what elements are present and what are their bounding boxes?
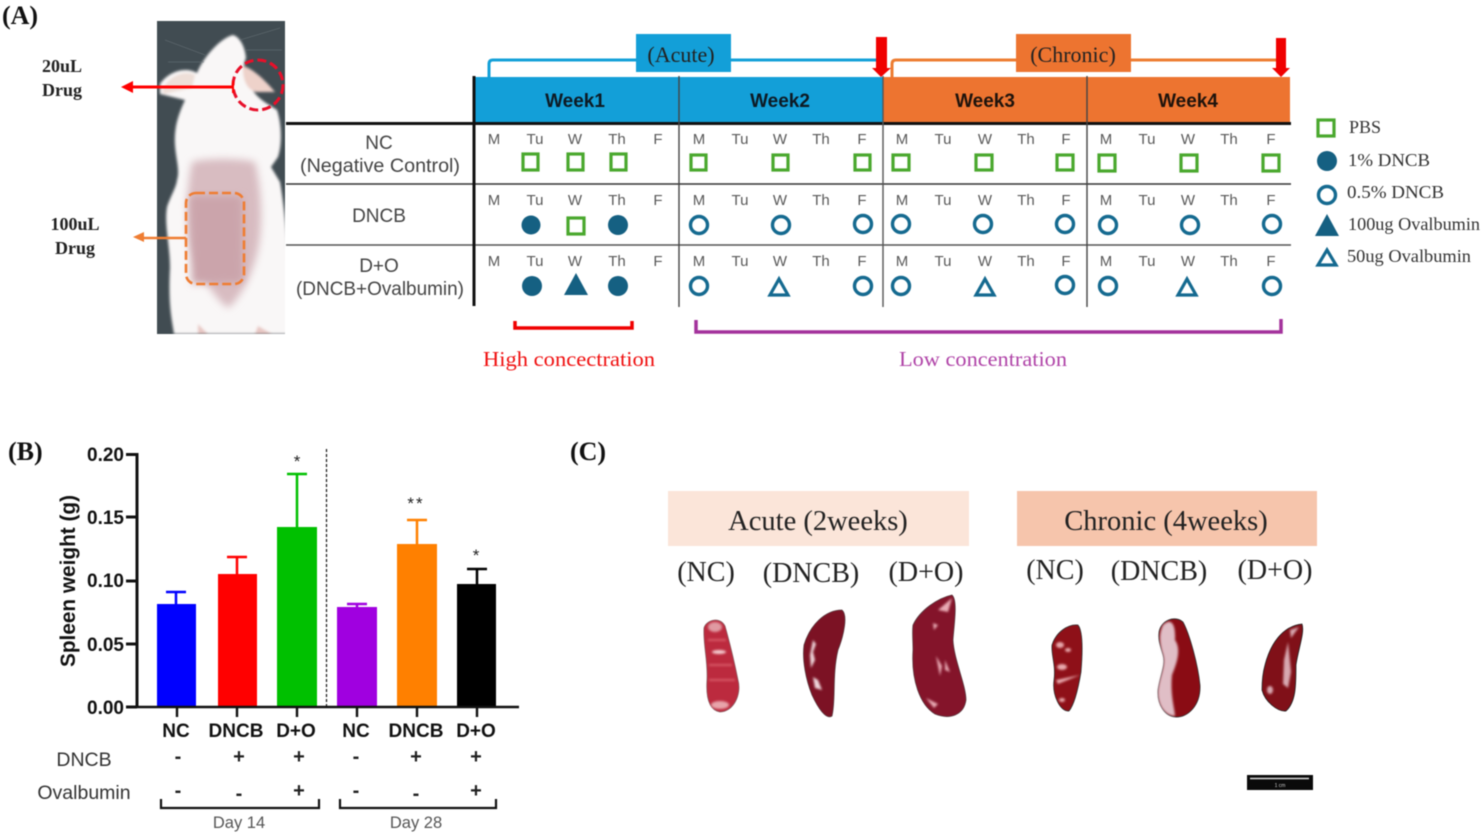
chronic group labels: (DNCB) bbox=[1111, 556, 1207, 587]
treatment plus and minus marks: - bbox=[413, 783, 419, 805]
weekday labels: M bbox=[1100, 192, 1112, 209]
legend: 50ug Ovalbumin bbox=[1347, 246, 1471, 266]
row labels bbox=[296, 133, 464, 300]
weekday labels: Th bbox=[1017, 131, 1035, 148]
treatment plus and minus marks: - bbox=[353, 746, 359, 768]
panel label A: (A) bbox=[2, 1, 38, 30]
weekday labels: W bbox=[773, 192, 788, 209]
acute bracket and tag: (Acute) bbox=[647, 42, 715, 67]
acute group labels: (D+O) bbox=[889, 557, 963, 588]
weekday labels: F bbox=[857, 253, 867, 270]
significance stars: * bbox=[473, 546, 480, 565]
day 14 bracket bbox=[161, 799, 319, 808]
weekday labels: Tu bbox=[1139, 192, 1155, 209]
weekday labels: Tu bbox=[935, 253, 951, 270]
row labels: NC bbox=[365, 133, 393, 154]
weekday labels: Tu bbox=[935, 192, 951, 209]
week headers: Week3 bbox=[955, 91, 1015, 112]
acute group labels: (DNCB) bbox=[763, 558, 859, 589]
legend: 1% DNCB bbox=[1348, 150, 1430, 170]
chronic header bbox=[1017, 491, 1317, 546]
x axis bbox=[137, 707, 519, 717]
weekday labels: F bbox=[1061, 253, 1071, 270]
spleen: chronic D+O bbox=[1262, 624, 1303, 711]
weekday labels: F bbox=[653, 131, 663, 148]
category labels: NC bbox=[342, 721, 370, 742]
row labels: (DNCB+Ovalbumin) bbox=[296, 279, 464, 300]
weekday labels: W bbox=[568, 192, 583, 209]
panel label B: (B) bbox=[8, 437, 43, 466]
significance stars: * bbox=[294, 452, 301, 471]
bar: NC day 14 bbox=[157, 592, 196, 707]
markers: DNCB row bbox=[522, 215, 1280, 235]
panel: C spleen photos bbox=[570, 437, 1317, 790]
weekday labels: W bbox=[568, 253, 583, 270]
y axis bbox=[87, 445, 138, 719]
acute header bbox=[668, 491, 969, 546]
weekday labels: Th bbox=[812, 131, 830, 148]
category labels: D+O bbox=[456, 721, 496, 742]
bar: DNCB day 28 bbox=[397, 520, 437, 707]
weekday labels: F bbox=[857, 131, 867, 148]
bar: DNCB day 14 bbox=[218, 557, 257, 707]
weekday labels: W bbox=[978, 192, 993, 209]
weekday labels: Th bbox=[1220, 131, 1238, 148]
week headers: Week2 bbox=[750, 91, 810, 112]
legend: 100ug Ovalbumin bbox=[1348, 214, 1480, 234]
weekday labels: M bbox=[488, 131, 500, 148]
spleen: acute NC bbox=[704, 620, 739, 712]
treatment plus and minus marks: - bbox=[175, 746, 181, 768]
category labels: NC bbox=[162, 721, 190, 742]
panel: B spleen weight chart bbox=[8, 437, 519, 832]
dashed box: back application site bbox=[186, 193, 244, 284]
chronic bracket and tag: (Chronic) bbox=[1030, 42, 1116, 67]
schedule grid lines bbox=[286, 76, 1291, 307]
weekday labels: W bbox=[1181, 131, 1196, 148]
spleen: acute DNCB bbox=[803, 610, 845, 717]
weekday labels: Th bbox=[812, 192, 830, 209]
spleen: acute D+O bbox=[913, 595, 966, 716]
weekday labels: M bbox=[1100, 253, 1112, 270]
mouse photo bbox=[157, 21, 288, 334]
chronic bracket and tag bbox=[892, 34, 1276, 77]
week headers: Week4 bbox=[1158, 91, 1218, 112]
bar: NC day 28 bbox=[337, 604, 377, 707]
treatment row labels: Ovalbumin bbox=[37, 782, 131, 804]
bar: D+O day 28 bbox=[457, 569, 496, 707]
y axis: 0.10 bbox=[87, 571, 124, 592]
significance stars bbox=[294, 452, 480, 565]
treatment plus and minus marks: + bbox=[470, 780, 482, 802]
weekday labels: Th bbox=[608, 192, 626, 209]
category labels: DNCB bbox=[209, 721, 263, 742]
weekday labels: W bbox=[773, 253, 788, 270]
red arrow: end of acute bbox=[872, 37, 891, 77]
weekday labels: Th bbox=[1017, 192, 1035, 209]
acute group labels bbox=[677, 557, 963, 589]
day 28 label: Day 28 bbox=[390, 814, 442, 832]
low concentration bracket bbox=[696, 319, 1281, 332]
week headers bbox=[475, 77, 1290, 123]
weekday labels: M bbox=[1100, 131, 1112, 148]
y axis: 0.00 bbox=[87, 698, 124, 719]
row labels: (Negative Control) bbox=[300, 156, 460, 177]
scale bar: 1 cm bbox=[1275, 783, 1285, 789]
y axis: 0.20 bbox=[87, 445, 124, 466]
label: 20uL drug: Drug bbox=[42, 80, 82, 100]
week headers: Week1 bbox=[545, 91, 605, 112]
weekday labels: M bbox=[896, 253, 908, 270]
legend: PBS bbox=[1349, 117, 1381, 137]
treatment plus and minus marks: + bbox=[293, 746, 305, 768]
acute bracket and tag bbox=[489, 34, 876, 77]
weekday labels: W bbox=[773, 131, 788, 148]
label: 100uL drug: Drug bbox=[55, 238, 95, 258]
weekday labels: M bbox=[488, 192, 500, 209]
weekday labels: M bbox=[896, 131, 908, 148]
markers: NC row bbox=[523, 154, 1279, 171]
treatment row labels: DNCB bbox=[56, 749, 112, 771]
arrow: back drug bbox=[133, 232, 186, 242]
weekday labels: W bbox=[568, 131, 583, 148]
weekday labels: Th bbox=[1017, 253, 1035, 270]
weekday labels: F bbox=[1266, 192, 1276, 209]
treatment plus and minus marks: + bbox=[293, 780, 305, 802]
low concentration label: Low concentration bbox=[899, 347, 1068, 371]
weekday labels: Th bbox=[1220, 253, 1238, 270]
spleen: chronic DNCB bbox=[1158, 619, 1200, 717]
weekday labels: Tu bbox=[527, 253, 543, 270]
day 14 label: Day 14 bbox=[213, 814, 265, 832]
panel: A dosing schedule bbox=[2, 1, 1480, 371]
weekday labels bbox=[488, 131, 1276, 270]
legend: 0.5% DNCB bbox=[1347, 182, 1444, 202]
high concentration bracket bbox=[515, 321, 632, 328]
weekday labels: Tu bbox=[935, 131, 951, 148]
weekday labels: F bbox=[857, 192, 867, 209]
red arrow: end of chronic bbox=[1272, 38, 1290, 77]
weekday labels: Tu bbox=[1139, 253, 1155, 270]
category labels: D+O bbox=[276, 721, 316, 742]
weekday labels: Tu bbox=[732, 192, 748, 209]
weekday labels: W bbox=[978, 131, 993, 148]
high concentration label: High concectration bbox=[483, 347, 656, 371]
weekday labels: M bbox=[896, 192, 908, 209]
bar: D+O day 14 bbox=[277, 474, 317, 707]
markers: D+O row bbox=[522, 273, 1280, 296]
weekday labels: Tu bbox=[732, 253, 748, 270]
chronic group labels bbox=[1026, 555, 1312, 587]
weekday labels: M bbox=[693, 192, 705, 209]
weekday labels: F bbox=[653, 192, 663, 209]
treatment plus and minus marks: + bbox=[233, 746, 245, 768]
weekday labels: F bbox=[653, 253, 663, 270]
weekday labels: F bbox=[1061, 131, 1071, 148]
weekday labels: M bbox=[693, 131, 705, 148]
weekday labels: M bbox=[693, 253, 705, 270]
treatment plus and minus marks: + bbox=[470, 746, 482, 768]
y axis: 0.15 bbox=[87, 508, 124, 529]
chronic group labels: (NC) bbox=[1026, 555, 1084, 586]
treatment plus and minus marks: + bbox=[410, 746, 422, 768]
category labels: DNCB bbox=[389, 721, 443, 742]
chronic group labels: (D+O) bbox=[1238, 555, 1312, 586]
label: 20uL drug: 20uL bbox=[42, 56, 82, 76]
label: 100uL drug: 100uL bbox=[50, 214, 100, 234]
row labels: DNCB bbox=[352, 206, 406, 227]
weekday labels: Th bbox=[1220, 192, 1238, 209]
arrow: ear drug bbox=[121, 81, 233, 93]
weekday labels: W bbox=[978, 253, 993, 270]
weekday labels: Th bbox=[608, 131, 626, 148]
weekday labels: F bbox=[1266, 131, 1276, 148]
day 28 bracket bbox=[340, 799, 496, 808]
dashed circle: ear application site bbox=[233, 60, 283, 110]
treatment plus and minus marks: - bbox=[175, 780, 181, 802]
divider day 14 and day 28 bbox=[326, 449, 328, 707]
chronic header: Chronic (4weeks) bbox=[1064, 506, 1268, 537]
weekday labels: Tu bbox=[732, 131, 748, 148]
weekday labels: F bbox=[1061, 192, 1071, 209]
panel label C: (C) bbox=[570, 437, 606, 466]
scale bar bbox=[1247, 775, 1313, 790]
acute group labels: (NC) bbox=[677, 557, 735, 588]
treatment plus and minus marks: - bbox=[236, 783, 242, 805]
weekday labels: W bbox=[1181, 192, 1196, 209]
weekday labels: Tu bbox=[527, 131, 543, 148]
row labels: D+O bbox=[359, 256, 399, 277]
weekday labels: W bbox=[1181, 253, 1196, 270]
y axis: 0.05 bbox=[87, 635, 124, 656]
legend bbox=[1315, 117, 1480, 266]
weekday labels: F bbox=[1266, 253, 1276, 270]
treatment plus and minus marks: - bbox=[353, 780, 359, 802]
significance stars: ** bbox=[407, 494, 425, 513]
spleen: chronic NC bbox=[1052, 625, 1082, 711]
treatment plus and minus marks bbox=[175, 746, 482, 805]
acute header: Acute (2weeks) bbox=[728, 506, 908, 537]
weekday labels: Th bbox=[608, 253, 626, 270]
weekday labels: Th bbox=[812, 253, 830, 270]
y axis title: Spleen weight (g) bbox=[57, 495, 80, 667]
treatment row labels bbox=[37, 749, 131, 804]
category labels bbox=[162, 721, 496, 742]
weekday labels: M bbox=[488, 253, 500, 270]
weekday labels: Tu bbox=[1139, 131, 1155, 148]
weekday labels: Tu bbox=[527, 192, 543, 209]
